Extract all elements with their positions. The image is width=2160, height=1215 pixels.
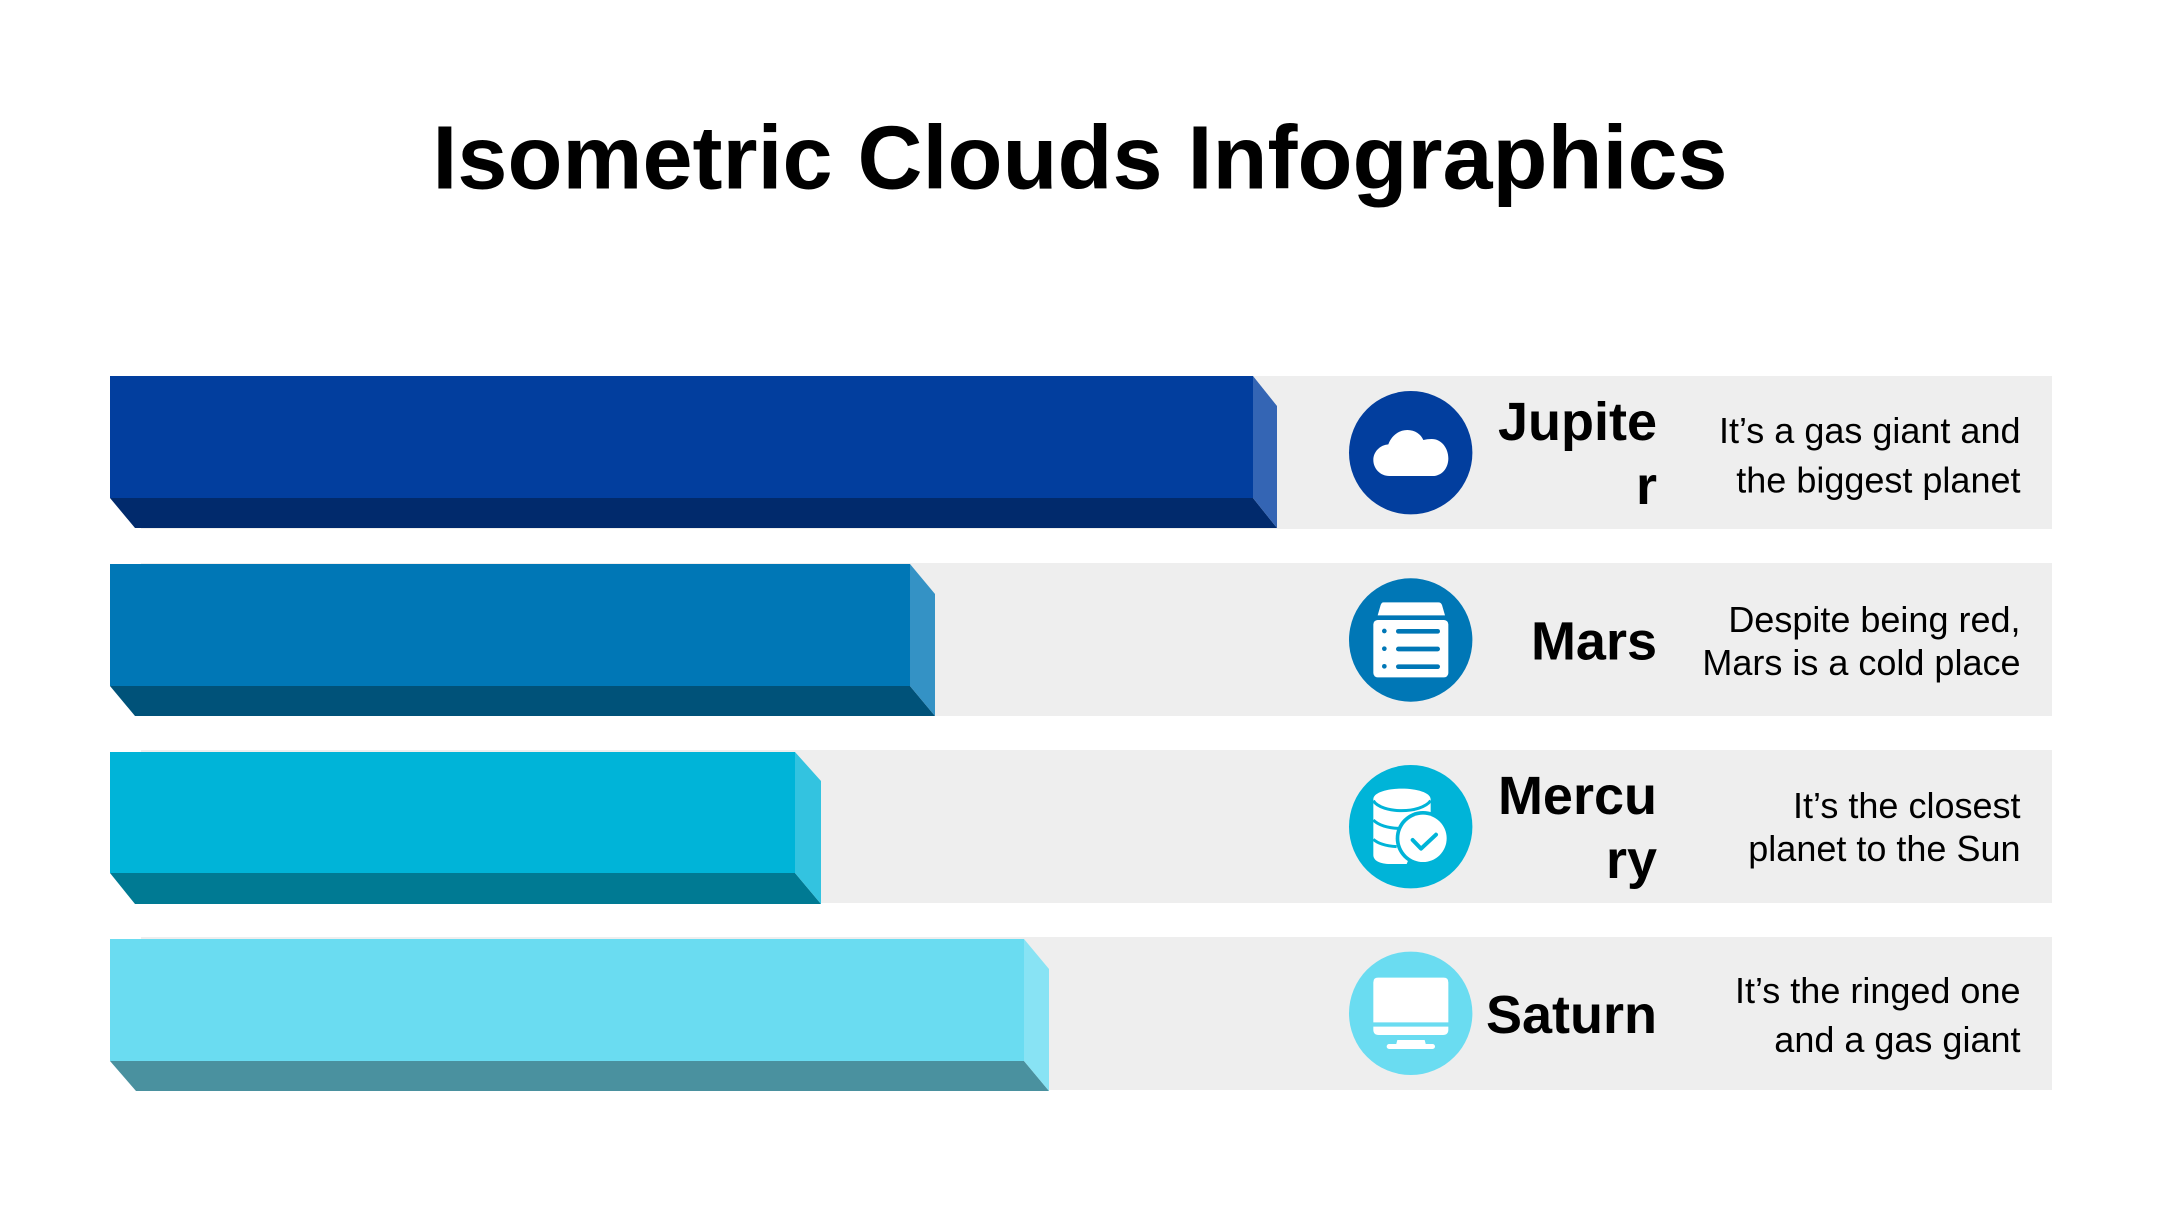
row: Mercury xyxy=(110,750,2052,904)
description: Mercury: It’s the closest xyxy=(1793,785,2020,826)
row: Jupiter xyxy=(110,376,2052,529)
3D bar: Mercury xyxy=(110,752,821,904)
icon: monitor xyxy=(1349,952,1472,1075)
description: Jupiter: It’s a gas giant and xyxy=(1719,410,2020,451)
name: Mars: Mars xyxy=(1531,612,1657,672)
title: Isometric Clouds Infographics xyxy=(432,108,1728,208)
panel background: Jupiter xyxy=(141,376,2052,529)
icon: database with check xyxy=(1349,765,1472,888)
description: Jupiter xyxy=(1719,410,2020,500)
name: Jupiter xyxy=(1498,392,1657,516)
3D bar: Mars xyxy=(110,564,935,716)
name: Mercury: ry xyxy=(1606,830,1657,890)
name: Saturn: Saturn xyxy=(1486,985,1657,1045)
panel background: Saturn xyxy=(141,937,2052,1090)
row: Saturn xyxy=(110,937,2052,1091)
panel background: Mercury xyxy=(141,750,2052,903)
description: Mercury xyxy=(1748,785,2020,869)
row: Mars xyxy=(110,563,2052,716)
description: Saturn xyxy=(1735,970,2020,1060)
name: Jupiter: Jupite xyxy=(1498,392,1657,452)
description: Mercury: planet to the Sun xyxy=(1748,828,2020,869)
3D bar: Jupiter xyxy=(110,376,1277,528)
icon: server xyxy=(1349,578,1472,702)
icon: cloud xyxy=(1349,391,1472,514)
description: Mars: Mars is a cold place xyxy=(1702,642,2020,683)
name: Mercury: Mercu xyxy=(1498,766,1657,826)
panel background: Mars xyxy=(141,563,2052,716)
name: Jupiter: r xyxy=(1636,456,1657,516)
description: Saturn: It’s the ringed one xyxy=(1735,970,2020,1011)
description: Mars xyxy=(1702,599,2020,683)
description: Mars: Despite being red, xyxy=(1728,599,2020,640)
3D bar: Saturn xyxy=(110,939,1049,1091)
name: Mercury xyxy=(1498,766,1657,890)
description: Jupiter: the biggest planet xyxy=(1736,460,2020,500)
description: Saturn: and a gas giant xyxy=(1774,1019,2020,1060)
